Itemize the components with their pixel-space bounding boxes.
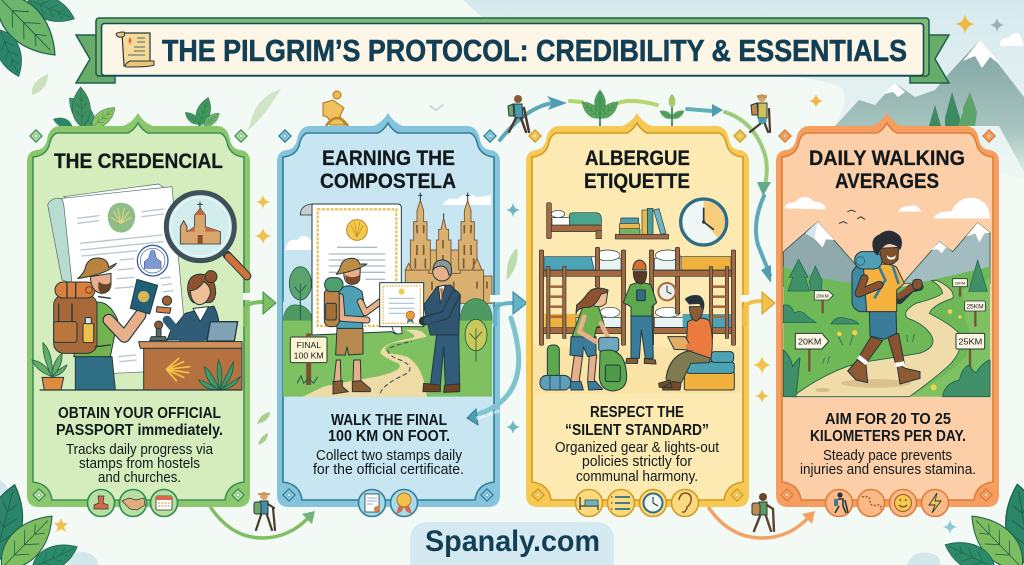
body text: card 3: RESPECT THE — [590, 404, 684, 421]
footer: Spanaly.com pill: Spanaly.com — [425, 525, 600, 558]
heading: card 4: AVERAGES — [835, 170, 939, 193]
corner ornaments: card 3 — [529, 130, 746, 501]
foliage: bottom-left leaves — [0, 480, 98, 565]
route arrows along the top — [500, 96, 771, 283]
heading: card 4: DAILY WALKING — [809, 147, 965, 170]
corner ornaments: card 2 — [279, 130, 496, 501]
corner ornaments: card 1 — [30, 130, 247, 501]
panel: card 1 The Credencial — [27, 113, 250, 516]
body text: card 1: and churches. — [98, 470, 181, 486]
cathedral — [405, 200, 492, 303]
icon row: stamp, handshake, calendar — [88, 490, 178, 516]
icon row: bed, checklist, clock, ear — [576, 490, 698, 516]
walker icon: top right route — [750, 94, 770, 132]
body text: card 3: “SILENT STANDARD” — [565, 422, 709, 439]
connector: arrow card 1 to card 2 — [243, 292, 276, 325]
foliage: top-left leaves — [0, 0, 79, 81]
illustration: certificate handover: 100 KM — [294, 352, 324, 361]
walker icon: top left route — [508, 95, 529, 132]
title banner — [76, 18, 949, 83]
body text: card 4: injuries and ensures stamina. — [800, 462, 976, 478]
body text: card 2: for the official certificate. — [313, 462, 464, 478]
heading: card 1: THE CREDENCIAL — [54, 150, 223, 173]
connector: loop under card 1 to card 2 — [211, 508, 315, 538]
heading: card 2 — [320, 147, 456, 193]
body text: card 4: AIM FOR 20 TO 25 — [825, 411, 951, 428]
illustration: certificate handover — [283, 193, 492, 397]
card-top ornament, card 2: small pilgrim emblem — [323, 91, 348, 126]
card-top plants, card 1 — [52, 87, 222, 132]
body text: card 4: KILOMETERS PER DAY. — [810, 428, 966, 445]
background: mountains top right — [835, 33, 1024, 172]
body text: card 1: Tracks daily progress via — [66, 442, 214, 458]
ribbon ends — [76, 35, 949, 83]
walker icon: below card 3 — [752, 493, 774, 531]
heading: card 2: EARNING THE — [322, 147, 455, 170]
connector: arrow card 2 to card 3 — [490, 292, 527, 325]
body text: card 1: stamps from hostels — [79, 456, 200, 472]
body text: card 3: Organized gear & lights-out — [555, 440, 719, 456]
illustration: bunk room — [533, 199, 741, 393]
body text: card 1: PASSPORT immediately. — [56, 422, 223, 439]
body text: card 3: policies strictly for — [582, 454, 692, 470]
body text: card 2: WALK THE FINAL — [331, 412, 447, 429]
illustration: walker on trail: 25KM — [966, 303, 984, 310]
body text: card 3 — [555, 404, 719, 485]
illustration: walker on trail: 20KM — [816, 293, 829, 298]
footer: Spanaly.com pill — [410, 522, 614, 565]
body text: card 1 — [56, 405, 223, 486]
body text: card 2 — [313, 412, 464, 478]
connector: blue ribbon arrow with small label: FINAL 100 KM — [476, 409, 500, 422]
heading: card 2: COMPOSTELA — [320, 170, 456, 193]
background: pale sky wash — [463, 0, 1024, 180]
illustration: passport desk — [32, 184, 247, 390]
body text: card 3: communal harmony. — [576, 469, 698, 485]
body text: card 2: Collect two stamps daily — [316, 448, 463, 464]
foliage: bottom-right leaves — [907, 481, 1024, 565]
panel: card 2 Earning the Compostela — [277, 113, 500, 516]
walker icon: below card 1 — [254, 492, 275, 530]
body text: card 4 — [800, 411, 976, 478]
connector: loop under card 3 to card 4 — [709, 508, 815, 538]
heading: card 3: ALBERGUE — [585, 147, 690, 170]
card-top plants, card 3 — [579, 90, 686, 126]
body text: card 4: Steady pace prevents — [823, 448, 952, 464]
connector: blue ribbon arrow with small label — [467, 318, 519, 425]
corner ornaments: card 4 — [779, 130, 995, 501]
heading: card 4 — [809, 147, 965, 193]
icon: scroll — [116, 32, 154, 67]
icon row: hiker, route, smile, bolt — [826, 490, 948, 516]
illustration: walker on trail: 20KM — [798, 336, 821, 346]
icon row: certificate, medal — [358, 490, 418, 516]
title text: THE PILGRIM’S PROTOCOL: CREDIBILITY & ESSENTIALS — [162, 33, 907, 68]
panel: card 3 Albergue Etiquette — [526, 113, 749, 516]
illustration: walker on trail — [783, 197, 990, 397]
body text: card 2: 100 KM ON FOOT. — [328, 428, 450, 445]
connector: arrow card 3 to card 4 — [740, 292, 775, 325]
illustration: walker on trail: 20KM — [955, 280, 965, 285]
body text: card 1: OBTAIN YOUR OFFICIAL — [58, 405, 221, 422]
panel: card 4 Daily Walking Averages — [776, 113, 999, 516]
heading: card 3 — [584, 147, 690, 193]
illustration: walker on trail: 25KM — [958, 336, 982, 346]
heading: card 3: ETIQUETTE — [584, 170, 690, 193]
illustration: certificate handover: FINAL — [297, 341, 322, 350]
